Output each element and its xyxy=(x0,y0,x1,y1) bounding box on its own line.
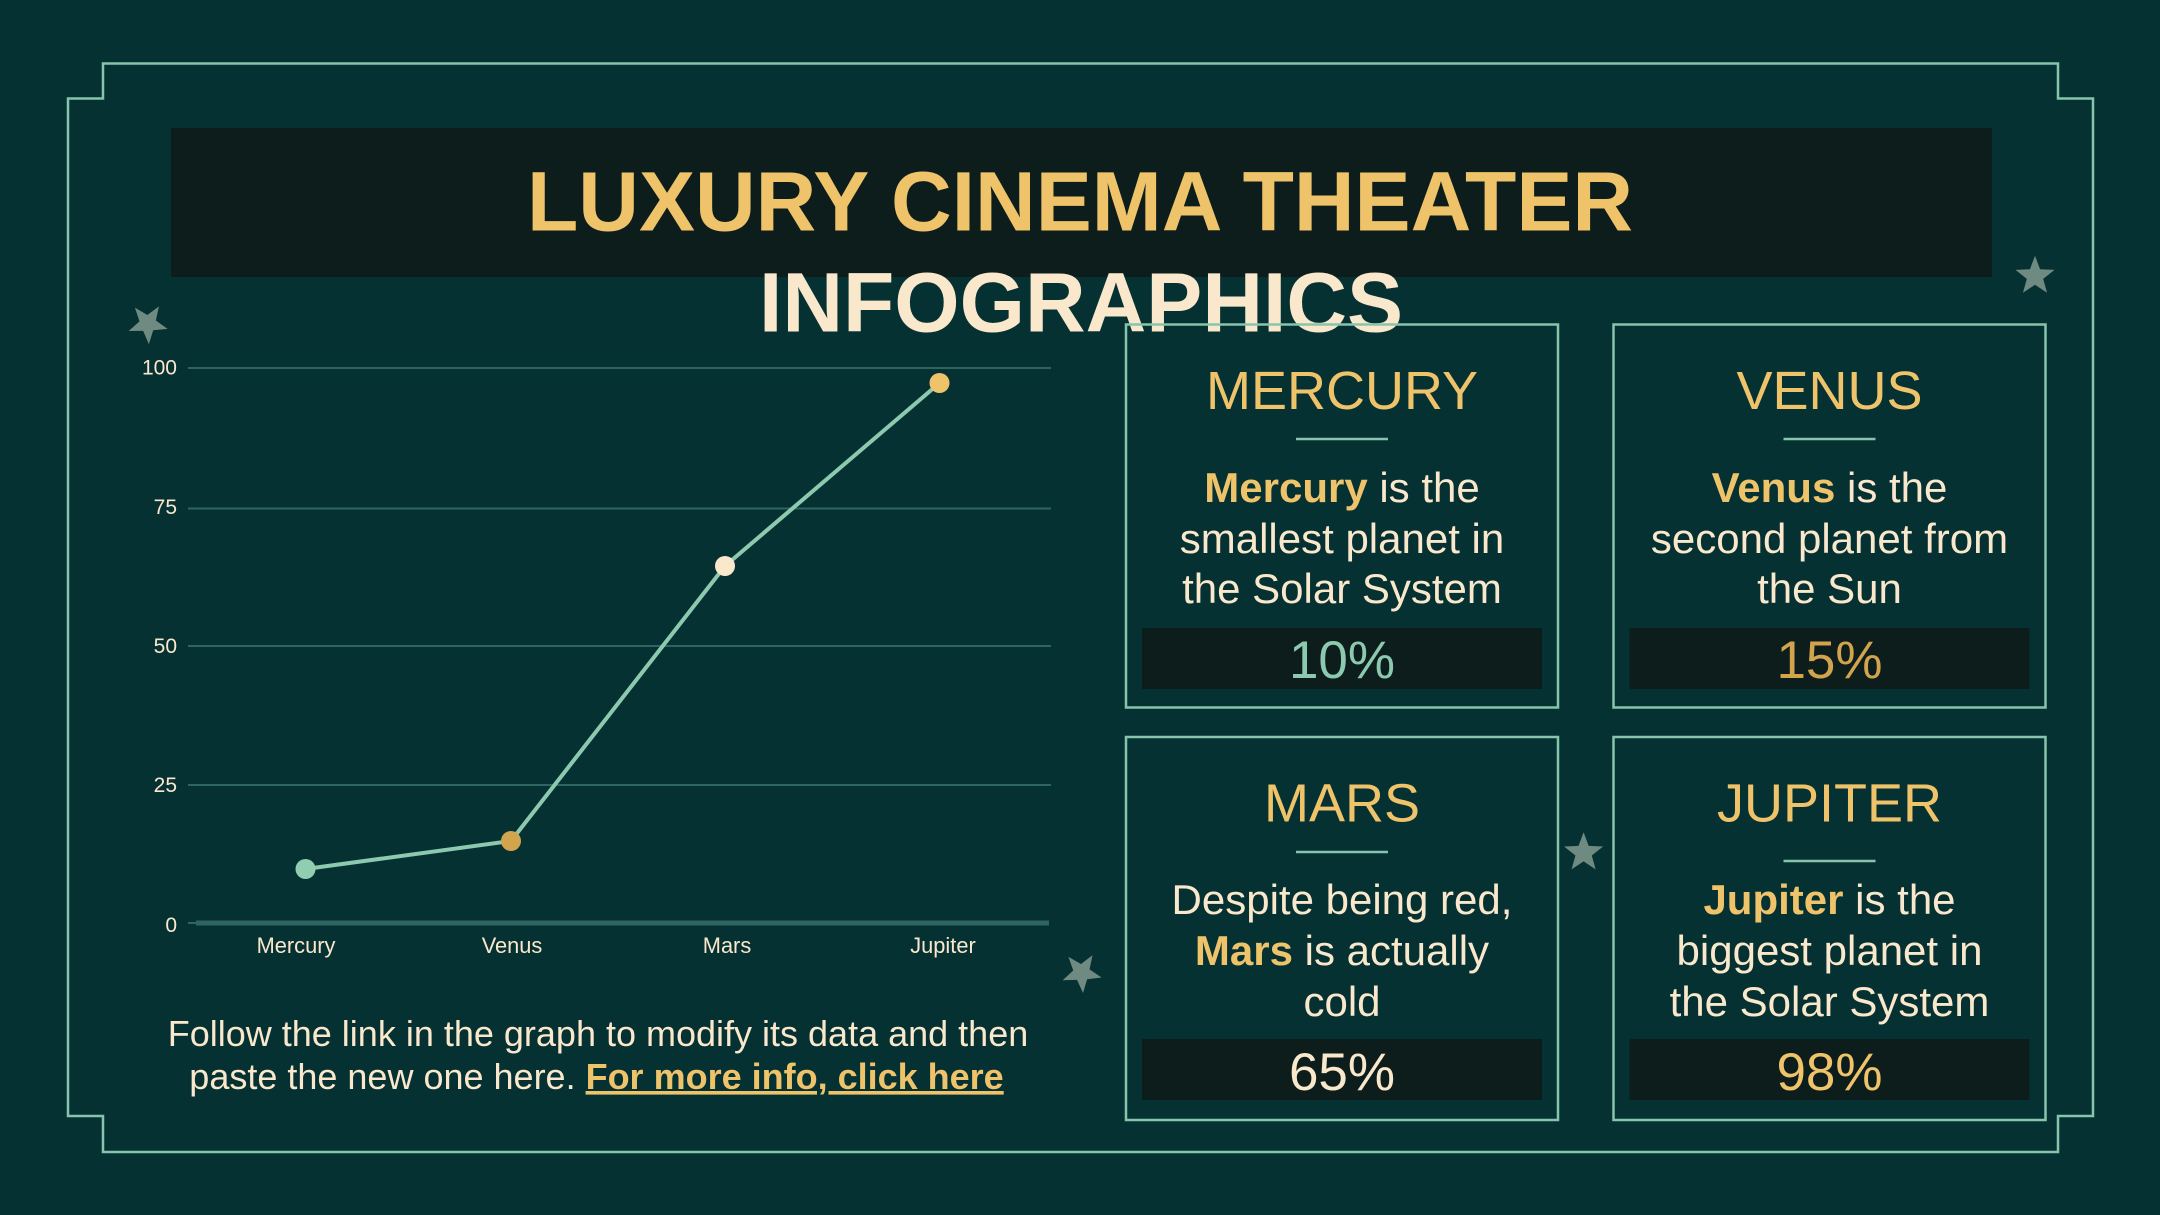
x axis labels: Venus xyxy=(482,933,542,958)
body: Venus: second planet from xyxy=(1651,515,2008,562)
x axis labels xyxy=(257,933,976,958)
y axis labels: 75 xyxy=(154,496,177,519)
panel: Venus xyxy=(1614,324,2046,708)
icon: star beside chart xyxy=(1056,945,1109,997)
x axis labels: Mercury xyxy=(257,933,335,958)
body: Mercury xyxy=(1180,464,1504,612)
panel: Mars xyxy=(1126,737,1558,1120)
body: Venus: Venus is the xyxy=(1712,464,1947,511)
value: Venus: 15% xyxy=(1776,631,1883,690)
heading: Mercury: MERCURY xyxy=(1206,361,1478,421)
x axis labels: Mars xyxy=(703,933,751,958)
data point: Mars xyxy=(715,556,735,576)
title xyxy=(527,154,1633,350)
footer note xyxy=(168,1013,1028,1097)
y axis labels: 25 xyxy=(154,774,177,797)
heading: Mars: MARS xyxy=(1264,774,1420,834)
y axis labels: 0 xyxy=(165,914,177,937)
body: Mars: Despite being red, xyxy=(1172,876,1512,923)
value: Mars: 65% xyxy=(1289,1043,1395,1102)
heading: Jupiter: JUPITER xyxy=(1717,774,1942,834)
data line xyxy=(306,383,940,869)
x axis labels: Jupiter xyxy=(910,933,976,958)
body: Mercury: Mercury is the xyxy=(1204,464,1480,511)
body: Mars xyxy=(1172,876,1512,1025)
y axis labels xyxy=(142,356,177,937)
icon: star top right xyxy=(2016,256,2054,293)
body: Jupiter: Jupiter is the xyxy=(1703,876,1956,923)
footer note: paste the new one here. For more info, click here xyxy=(189,1056,1004,1097)
footer note: Follow the link in the graph to modify its data and then xyxy=(168,1013,1028,1054)
data point: Venus xyxy=(501,831,521,851)
y axis labels: 50 xyxy=(154,635,177,658)
heading: Venus: VENUS xyxy=(1736,361,1923,421)
y axis labels: 100 xyxy=(142,356,177,380)
body: Venus xyxy=(1651,464,2008,612)
title: LUXURY CINEMA THEATER xyxy=(527,154,1633,248)
body: Mercury: smallest planet in xyxy=(1180,515,1504,562)
body: Jupiter: biggest planet in xyxy=(1677,927,1982,974)
data point: Jupiter xyxy=(930,373,950,393)
data point: Mercury xyxy=(296,859,316,879)
icon: star top left xyxy=(127,306,168,345)
body: Mars: cold xyxy=(1303,978,1381,1025)
line chart xyxy=(142,356,1051,958)
body: Jupiter: the Solar System xyxy=(1670,978,1989,1025)
icon: star between cards xyxy=(1564,832,1603,869)
title: INFOGRAPHICS xyxy=(759,256,1403,350)
body: Mercury: the Solar System xyxy=(1182,565,1502,612)
body: Mars: Mars is actually xyxy=(1195,927,1489,974)
value: Mercury: 10% xyxy=(1289,631,1395,690)
title band xyxy=(171,128,1992,277)
body: Venus: the Sun xyxy=(1757,565,1902,612)
panel: Mercury xyxy=(1126,324,1558,708)
value: Jupiter: 98% xyxy=(1776,1043,1883,1102)
panel: Jupiter xyxy=(1614,737,2046,1120)
body: Jupiter xyxy=(1670,876,1989,1025)
